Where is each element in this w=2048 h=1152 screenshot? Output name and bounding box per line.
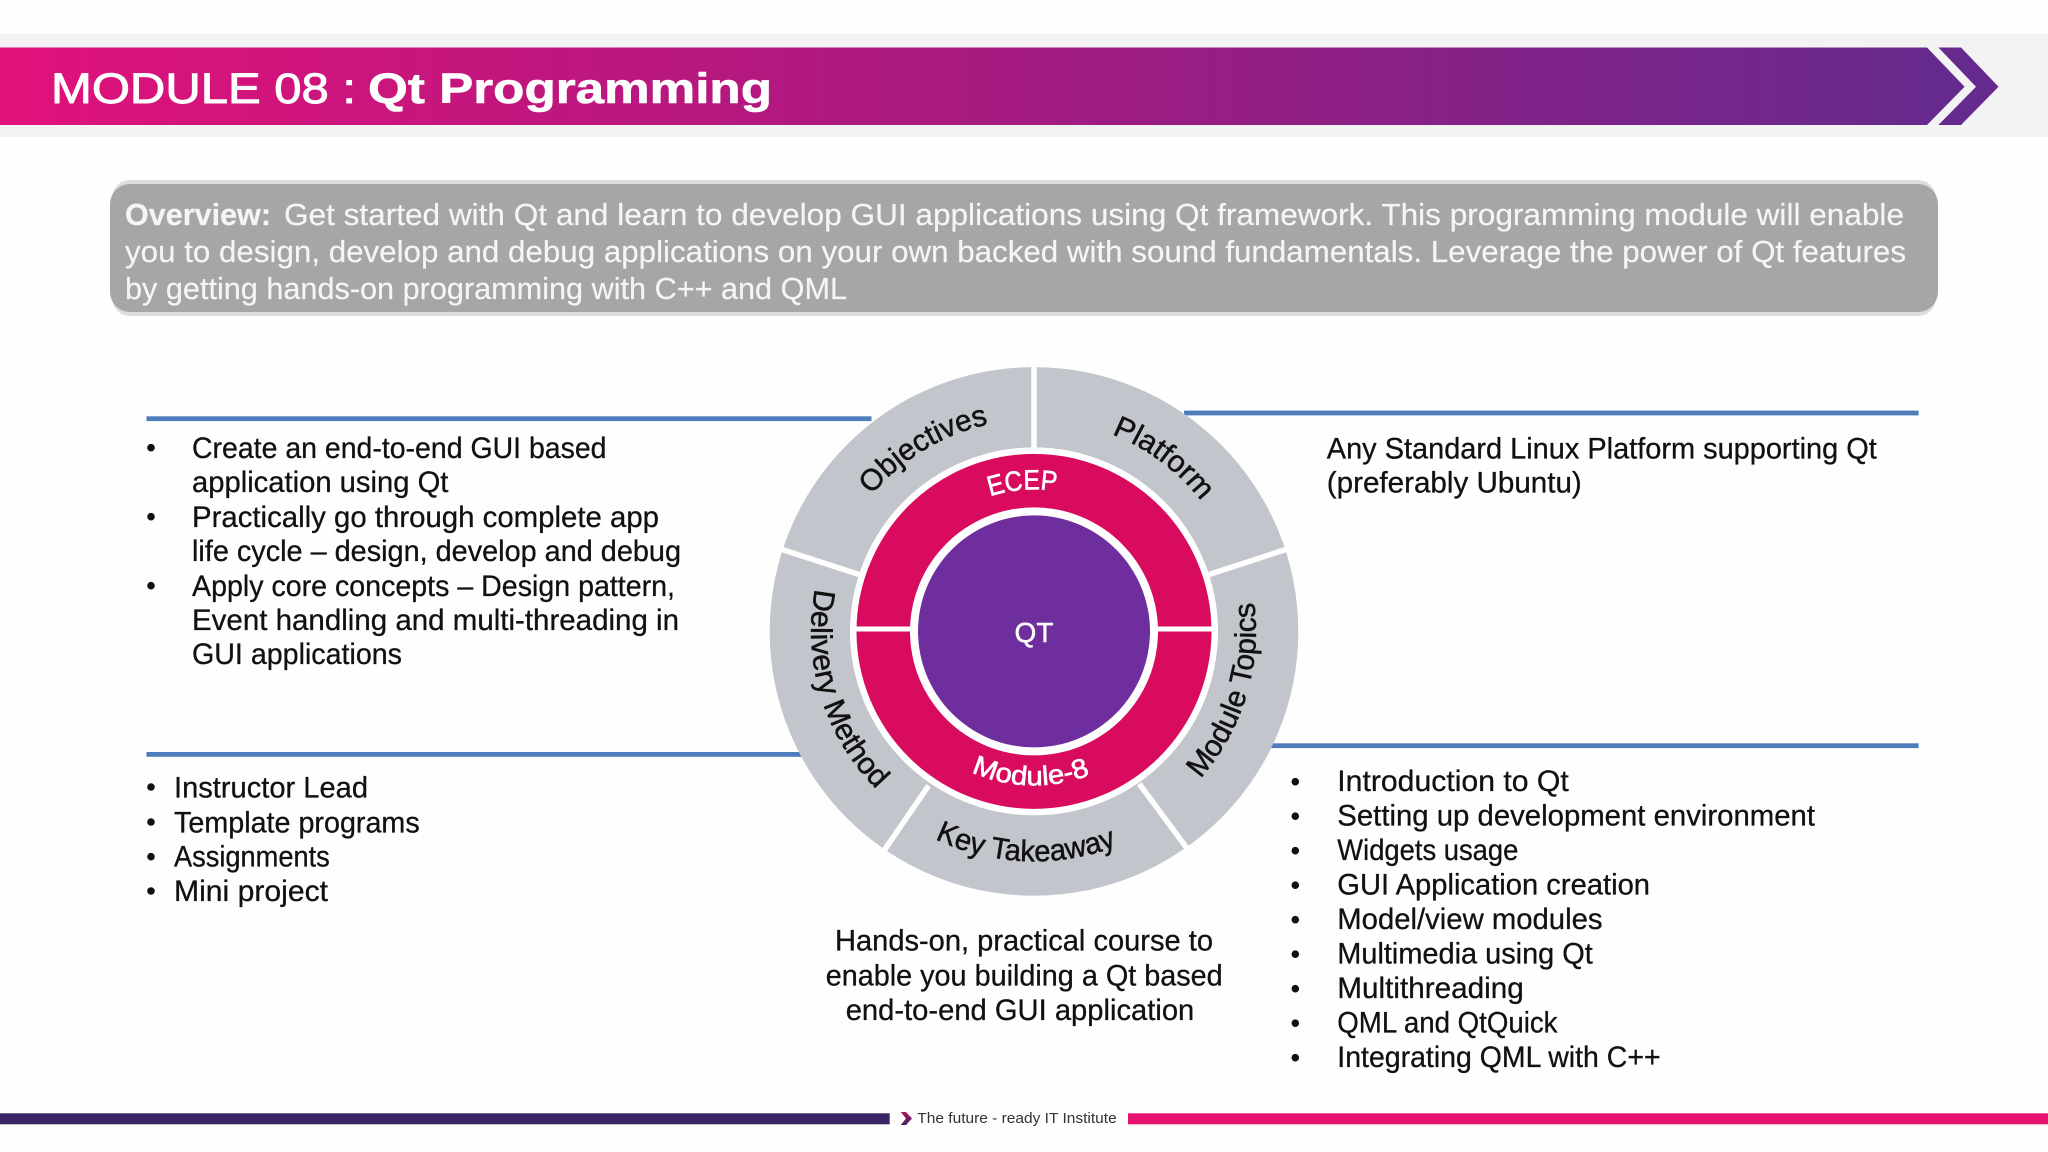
label: Module-8: Module-8 bbox=[973, 755, 1088, 786]
label: Key Takeaway: Key Takeaway bbox=[936, 820, 1112, 862]
text block: module topics: Widgets usage bbox=[1337, 834, 1518, 867]
text block: module topics: Setting up development environment bbox=[1337, 799, 1816, 832]
header banner bbox=[0, 34, 2048, 137]
text block: module topics: QML and QtQuick bbox=[1337, 1006, 1558, 1040]
text block: module topics: Multithreading bbox=[1337, 972, 1524, 1005]
text block: objectives: Apply core concepts – Design pattern, bbox=[192, 570, 675, 603]
text block: delivery method: Assignments bbox=[174, 841, 330, 874]
text block: objectives: application using Qt bbox=[192, 466, 449, 499]
text block: module topics bbox=[1292, 765, 1816, 1074]
outer grey ring bbox=[770, 367, 1298, 896]
title: Qt Programming bbox=[368, 65, 772, 113]
overview text: Overview: bbox=[125, 197, 271, 232]
text block: platform: Any Standard Linux Platform supporting Qt bbox=[1327, 432, 1877, 465]
tagline: The future - ready IT Institute bbox=[917, 1110, 1117, 1127]
centre purple circle bbox=[918, 515, 1150, 747]
text block: platform bbox=[1327, 432, 1877, 500]
text block: module topics: Multimedia using Qt bbox=[1337, 938, 1593, 970]
text block: module topics: Introduction to Qt bbox=[1337, 765, 1569, 798]
icon: footer chevron bbox=[901, 1112, 912, 1125]
text block: delivery method: Template programs bbox=[174, 806, 420, 839]
label: Delivery Method: Delivery Method bbox=[810, 590, 892, 788]
title: MODULE 08 : bbox=[51, 65, 356, 113]
connector line: delivery method bbox=[146, 752, 802, 757]
text block: delivery method bbox=[147, 772, 420, 908]
connector line: module topics bbox=[1271, 743, 1919, 748]
label: ECEP: ECEP bbox=[986, 470, 1057, 496]
text block: objectives: Create an end-to-end GUI based bbox=[192, 432, 606, 465]
circular diagram bbox=[770, 367, 1298, 896]
banner arrow body bbox=[0, 48, 1965, 125]
label: Objectives: Objectives bbox=[860, 410, 987, 490]
middle red ring bbox=[856, 454, 1212, 809]
text block: key takeaway: enable you building a Qt based bbox=[826, 959, 1223, 992]
text block: module topics: Model/view modules bbox=[1337, 903, 1602, 936]
banner chevron bbox=[1938, 48, 1998, 125]
footer bbox=[0, 1110, 2048, 1127]
label: Module Topics: Module Topics bbox=[1186, 604, 1262, 778]
label: Platform: Platform bbox=[1114, 416, 1211, 500]
text block: delivery method: Instructor Lead bbox=[174, 772, 368, 805]
text block: module topics: GUI Application creation bbox=[1337, 868, 1650, 902]
text block: objectives bbox=[147, 432, 681, 671]
connector line: platform bbox=[1184, 411, 1919, 415]
text block: objectives: GUI applications bbox=[192, 638, 402, 671]
connector line: objectives bbox=[146, 416, 872, 421]
label: QT: QT bbox=[1015, 617, 1053, 648]
overview text bbox=[125, 197, 1906, 306]
text block: objectives: Practically go through complete app bbox=[192, 501, 659, 534]
overview text: by getting hands-on programming with C++ and QML bbox=[125, 271, 847, 306]
text block: key takeaway: Hands-on, practical course to bbox=[835, 925, 1213, 958]
panel: overview bbox=[110, 180, 1938, 316]
text block: module topics: Integrating QML with C++ bbox=[1337, 1041, 1661, 1074]
overview text: Get started with Qt and learn to develop GUI applications using Qt framework. This programming module will enable bbox=[284, 197, 1904, 232]
text block: key takeaway: end-to-end GUI application bbox=[846, 994, 1194, 1027]
text block: key takeaway bbox=[826, 925, 1223, 1027]
title bbox=[51, 65, 772, 113]
text block: platform: (preferably Ubuntu) bbox=[1327, 467, 1582, 500]
text block: objectives: Event handling and multi-threading in bbox=[192, 604, 679, 637]
text block: delivery method: Mini project bbox=[174, 875, 329, 908]
overview text: you to design, develop and debug applications on your own backed with sound fundamentals. Leverage the power of Qt features bbox=[125, 234, 1906, 269]
text block: objectives: life cycle – design, develop and debug bbox=[192, 535, 681, 568]
